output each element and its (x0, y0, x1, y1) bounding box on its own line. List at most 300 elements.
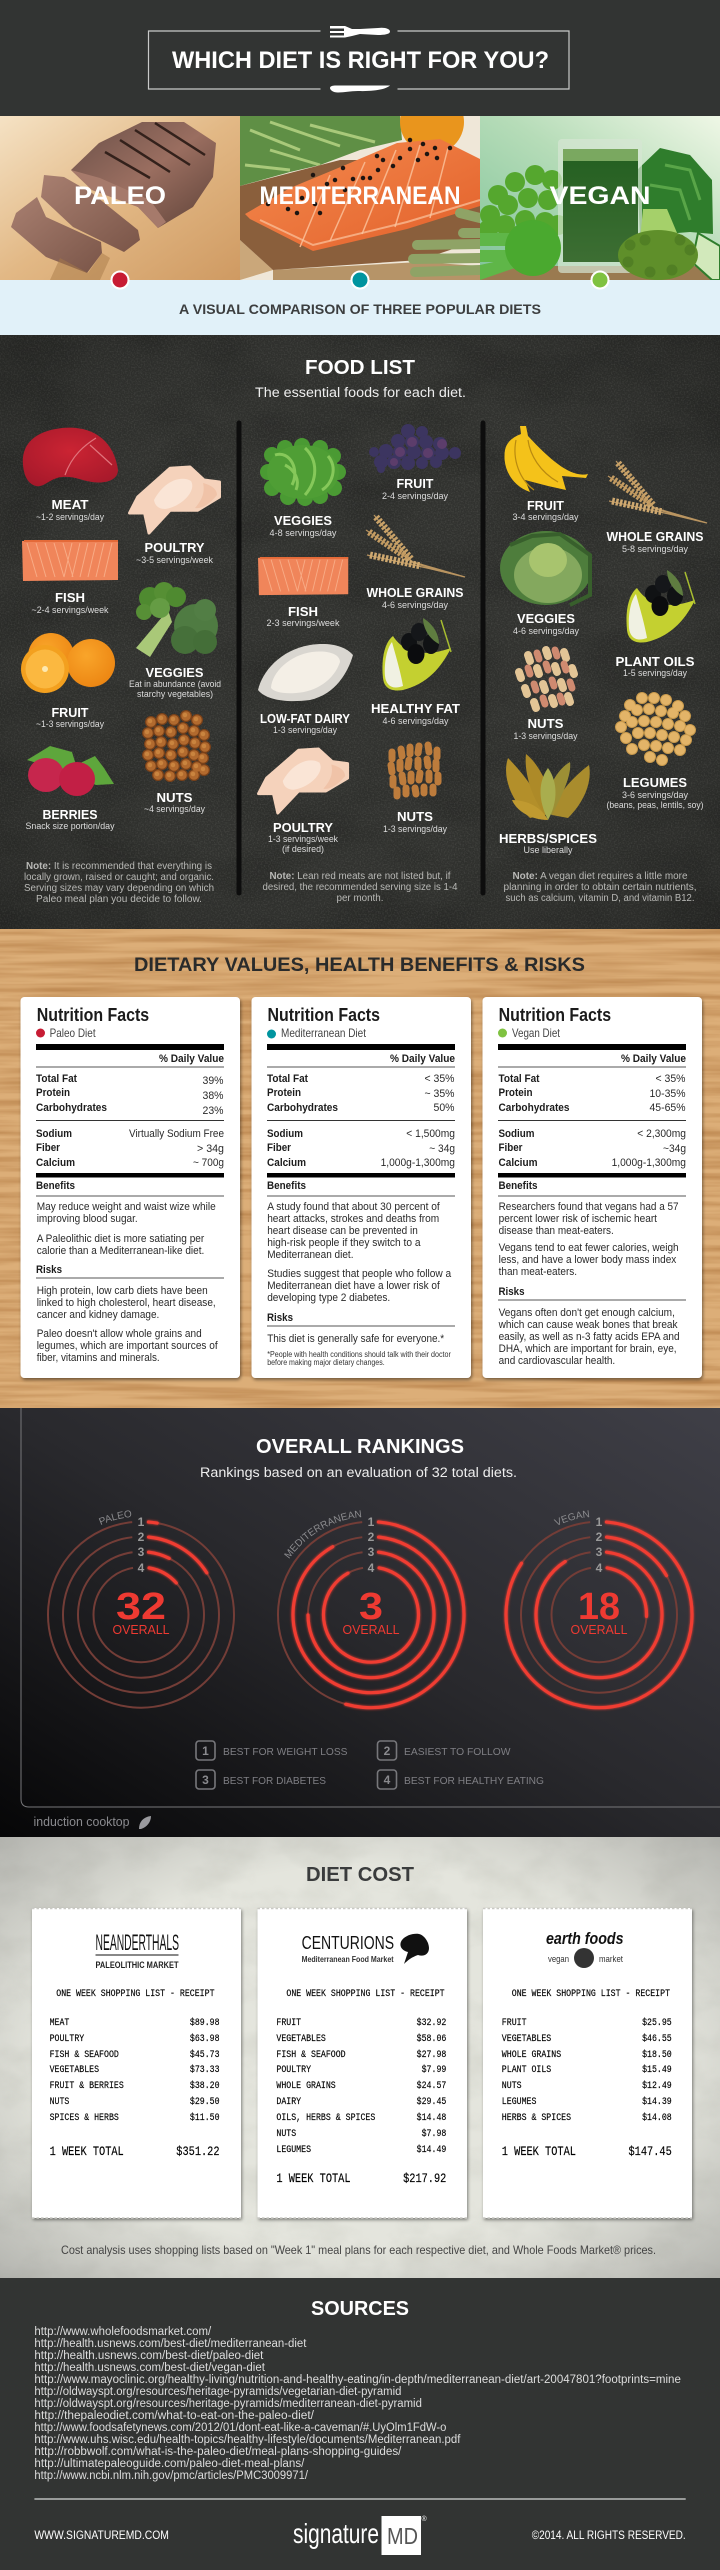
food: veggies: starchy vegetables) (137, 689, 213, 700)
heading: DIET COST (306, 1864, 414, 1886)
chart: mediterranean rings: 2 (368, 1530, 375, 1544)
receipt: mediterranean: $27.98 (417, 2048, 446, 2060)
card: paleo: 23% (202, 1105, 224, 1117)
food: berries (26, 746, 115, 832)
logo: signature md: MD (387, 2523, 418, 2549)
receipt: mediterranean: $58.06 (417, 2032, 446, 2044)
receipt: paleo: $11.50 (190, 2111, 220, 2123)
receipt: vegan: $14.08 (642, 2111, 672, 2123)
chart: vegan rings: VEGAN (554, 1510, 590, 1525)
food: low-fat dairy: 1-3 servings/day (273, 725, 337, 736)
receipt: vegan (483, 1908, 692, 2218)
panel: sources (0, 2278, 720, 2570)
receipt: mediterranean: ONE WEEK SHOPPING LIST - RECEIPT (286, 1987, 445, 1999)
food: fruit (21, 633, 115, 730)
icon: knife (330, 86, 390, 92)
card: paleo: Sodium (36, 1128, 72, 1140)
receipt: paleo: $351.22 (176, 2145, 220, 2159)
heading: DIETARY VALUES, HEALTH BENEFITS & RISKS (134, 955, 585, 976)
receipt: vegan: VEGETABLES (502, 2032, 552, 2044)
source list: http://www.uhs.wisc.edu/health-topics/healthy-lifestyle/documents/Mediterranean.pdf (34, 2434, 461, 2446)
food: herbs and spices (499, 754, 597, 856)
icon: globe (574, 1948, 594, 1968)
card: mediterranean: high-risk people if they switch to a (267, 1237, 421, 1249)
card: vegan: Risks (498, 1286, 524, 1298)
card: mediterranean: 1,000g-1,300mg (381, 1157, 455, 1169)
source list: http://oldwayspt.org/resources/heritage-pyramids/vegetarian-diet-pyramid (34, 2386, 401, 2398)
food: whole grains: 4-6 servings/day (382, 600, 448, 611)
card: vegan: and cardiovascular health. (499, 1355, 615, 1367)
dot: paleo (36, 1028, 45, 1038)
card: mediterranean: This diet is generally safe for everyone.* (267, 1333, 444, 1345)
food: herbs and spices: HERBS/SPICES (499, 832, 597, 846)
food: plant oils: PLANT OILS (616, 655, 694, 669)
receipt: paleo: SPICES & HERBS (50, 2111, 119, 2123)
card: mediterranean: ~ 34g (429, 1143, 455, 1155)
food: nuts: 1-3 servings/day (514, 731, 578, 742)
note: paleo (24, 861, 214, 905)
food: nuts: ~4 servings/day (144, 804, 205, 815)
chart: paleo rings: OVERALL (112, 1622, 170, 1637)
logo: earth foods (546, 1929, 624, 1968)
label: vegan: VEGAN (550, 182, 650, 210)
food: fruit (504, 426, 588, 523)
receipt: mediterranean: $14.49 (417, 2143, 446, 2155)
card: mediterranean: 50% (434, 1102, 455, 1114)
legend (196, 1741, 544, 1789)
logo: centurions (302, 1933, 429, 1964)
chart: paleo rings: 1 (138, 1515, 145, 1529)
logo: centurions: CENTURIONS (302, 1933, 394, 1953)
food: poultry (258, 749, 348, 855)
legend: EASIEST TO FOLLOW (404, 1746, 511, 1758)
card: vegan: disease than meat-eaters. (499, 1225, 614, 1237)
logo: earth foods: vegan (548, 1954, 569, 1965)
dot: vegan (498, 1028, 507, 1038)
card: mediterranean: Fiber (267, 1142, 292, 1154)
receipt: mediterranean: 1 WEEK TOTAL (276, 2172, 351, 2186)
food: nuts: 1-3 servings/day (383, 824, 447, 835)
receipt: vegan: WHOLE GRAINS (502, 2048, 562, 2060)
food: nuts: NUTS (156, 791, 192, 805)
food: fruit: ~1-3 servings/day (36, 719, 104, 730)
subtitle: A VISUAL COMPARISON OF THREE POPULAR DIETS (179, 302, 541, 317)
receipt: mediterranean: $7.98 (422, 2127, 446, 2139)
column: paleo foods (21, 428, 221, 905)
chart: vegan rings: 4 (596, 1561, 603, 1575)
source list: http://health.usnews.com/best-diet/paleo-diet (34, 2350, 264, 2362)
card: vegan: Vegans tend to eat fewer calories, weigh (499, 1242, 679, 1254)
dot: paleo (112, 272, 128, 288)
chart: mediterranean rings: 4 (368, 1561, 375, 1575)
card: vegan: ~34g (663, 1143, 686, 1155)
logo: signature md (293, 2515, 428, 2555)
food: nuts (144, 715, 205, 815)
card: vegan: Researchers found that vegans had a 57 (499, 1201, 679, 1213)
card: mediterranean: Benefits (267, 1180, 306, 1192)
card: vegan: 45-65% (650, 1102, 686, 1114)
receipt: vegan: $18.50 (642, 2048, 672, 2060)
card: vegan: < 35% (656, 1073, 686, 1085)
receipt: vegan: LEGUMES (502, 2095, 537, 2107)
card: paleo: cancer and kidney damage. (37, 1309, 159, 1321)
legend: 4 (384, 1773, 391, 1787)
receipt: paleo: 1 WEEK TOTAL (50, 2145, 124, 2159)
card: paleo: calorie than a Mediterranean-like diet. (37, 1245, 204, 1257)
receipt: paleo: $45.73 (190, 2048, 220, 2060)
note: paleo: Note: It is recommended that everything is (26, 861, 212, 872)
food: veggies: Eat in abundance (avoid (129, 679, 221, 690)
food: berries: BERRIES (42, 808, 98, 822)
card: vegan: less, and have a lower body mass index (499, 1254, 677, 1266)
receipt: paleo: $29.50 (190, 2095, 220, 2107)
receipt: mediterranean: LEGUMES (276, 2143, 311, 2155)
chart: mediterranean rings: MEDITERRANEAN (284, 1510, 362, 1558)
food: legumes: 3-6 servings/day (622, 790, 688, 801)
food: healthy fat: HEALTHY FAT (371, 702, 460, 716)
card: paleo: Nutrition Facts (37, 1005, 149, 1025)
card: mediterranean (252, 997, 471, 1378)
card: paleo: Carbohydrates (36, 1102, 107, 1114)
chart: vegan rings (502, 1510, 696, 1712)
food: veggies: 4-6 servings/day (513, 626, 579, 637)
receipt: paleo (32, 1908, 241, 2218)
food: fish (258, 557, 348, 629)
food: fish (22, 540, 118, 616)
receipt: vegan: 1 WEEK TOTAL (502, 2145, 576, 2159)
card: paleo: May reduce weight and waist wize while (37, 1201, 216, 1213)
receipt: mediterranean: FRUIT (276, 2016, 302, 2028)
copyright: ©2014. ALL RIGHTS RESERVED. (532, 2528, 686, 2542)
receipt: vegan: $12.49 (642, 2079, 672, 2091)
card: paleo (20, 997, 240, 1378)
logo: earth foods: market (599, 1954, 623, 1965)
title: WHICH DIET IS RIGHT FOR YOU? (172, 47, 549, 74)
card: paleo: 39% (202, 1075, 224, 1087)
card: mediterranean: Mediterranean diet have a lower risk of (267, 1280, 440, 1292)
legend: BEST FOR WEIGHT LOSS (223, 1746, 348, 1758)
food: veggies (267, 445, 339, 539)
card: mediterranean: ~ 35% (424, 1088, 455, 1100)
subheading: The essential foods for each diet. (255, 385, 466, 400)
food: fruit (369, 424, 461, 502)
card: mediterranean: Sodium (267, 1128, 303, 1140)
food: low-fat dairy: LOW-FAT DAIRY (260, 712, 351, 726)
card: vegan (482, 997, 702, 1378)
note: vegan (504, 871, 696, 904)
card: mediterranean: Studies suggest that people who follow a (267, 1268, 451, 1280)
heading: OVERALL RANKINGS (256, 1436, 464, 1458)
dot: mediterranean (267, 1030, 276, 1038)
receipt: mediterranean: $24.57 (417, 2079, 446, 2091)
source list: http://www.ncbi.nlm.nih.gov/pmc/articles/PMC3009971/ (34, 2470, 309, 2482)
food: whole grains (606, 461, 707, 555)
panel: diet cost (0, 1837, 720, 2278)
food: poultry: POULTRY (144, 541, 205, 555)
food: whole grains: WHOLE GRAINS (606, 530, 704, 544)
food: veggies: VEGGIES (146, 666, 204, 680)
card: mediterranean: *People with health conditions should talk with their doctor (267, 1350, 451, 1359)
panel: dietary values (0, 929, 720, 1408)
food: fruit: FRUIT (527, 499, 564, 513)
source list: http://health.usnews.com/best-diet/mediterranean-diet (34, 2338, 307, 2350)
receipt: mediterranean: $32.92 (417, 2016, 446, 2028)
legend: 3 (202, 1773, 209, 1787)
receipt: vegan: NUTS (502, 2079, 522, 2091)
card: paleo: % Daily Value (159, 1053, 224, 1065)
card: vegan: 10-35% (650, 1088, 686, 1100)
card: paleo: fiber, vitamins and minerals. (37, 1352, 160, 1364)
card: vegan: easily, as well as n-3 fatty acids EPA and (499, 1331, 680, 1343)
food: nuts (514, 650, 578, 742)
card: mediterranean: Mediterranean diet. (267, 1249, 354, 1261)
receipt: mediterranean: OILS, HERBS & SPICES (276, 2111, 376, 2123)
card: vegan: 1,000g-1,300mg (612, 1157, 686, 1169)
chart: mediterranean rings: OVERALL (342, 1622, 400, 1637)
card: mediterranean: % Daily Value (390, 1053, 455, 1065)
card: vegan: % Daily Value (621, 1053, 686, 1065)
chart: paleo rings: PALEO (98, 1510, 132, 1525)
card: paleo: Risks (36, 1264, 62, 1276)
note: vegan: such as calcium, vitamin D, and vitamin B12. (506, 893, 694, 904)
card: paleo: High protein, low carb diets have been (37, 1285, 208, 1297)
header band (0, 0, 720, 116)
card: paleo: linked to high cholesterol, heart disease, (37, 1297, 216, 1309)
food: low-fat dairy (258, 644, 353, 736)
source list: http://oldwayspt.org/resources/heritage-pyramids/mediterranean-diet-pyramid (34, 2398, 422, 2410)
receipt: paleo: NUTS (50, 2095, 70, 2107)
receipt: vegan: $14.39 (642, 2095, 672, 2107)
food: veggies (129, 582, 221, 700)
food: healthy fat: 4-6 servings/day (382, 716, 449, 727)
chart: paleo rings: 32 (116, 1586, 166, 1628)
heading: FOOD LIST (305, 357, 415, 379)
source list: http://thepaleodiet.com/what-to-eat-on-the-paleo-diet/ (34, 2410, 315, 2422)
receipt: paleo: VEGETABLES (50, 2063, 100, 2075)
legend: 1 (202, 1744, 209, 1758)
chart: vegan rings: 1 (596, 1515, 603, 1529)
note: mediterranean: Note: Lean red meats are not listed but, if (270, 871, 451, 882)
food: veggies: VEGGIES (274, 514, 332, 528)
chart: paleo rings: 4 (138, 1561, 145, 1575)
card: vegan: DHA, which are important for brain, eye, (499, 1343, 677, 1355)
food: poultry: 1-3 servings/week (268, 834, 338, 845)
source list: http://robbwolf.com/what-is-the-paleo-diet/meal-plans-shopping-guides/ (34, 2446, 402, 2458)
food: meat: ~1-2 servings/day (36, 512, 104, 523)
receipt: paleo: FRUIT & BERRIES (50, 2079, 124, 2091)
food: whole grains (366, 515, 465, 611)
card: mediterranean: < 1,500mg (406, 1128, 455, 1140)
food: poultry (130, 467, 220, 566)
receipt: mediterranean: $217.92 (403, 2172, 446, 2186)
card: mediterranean: Nutrition Facts (268, 1005, 380, 1025)
note: mediterranean: desired, the recommended serving size is 1-4 (262, 882, 458, 893)
receipt: mediterranean: WHOLE GRAINS (276, 2079, 336, 2091)
food: fish: ~2-4 servings/week (32, 605, 109, 616)
chart: vegan rings: 18 (578, 1586, 620, 1628)
card: paleo: Benefits (36, 1180, 75, 1192)
food: legumes: LEGUMES (623, 776, 687, 790)
food: nuts (383, 745, 447, 835)
photo: paleo (0, 116, 240, 280)
title frame (148, 31, 569, 89)
receipt: vegan: $15.49 (642, 2063, 672, 2075)
chart: vegan rings: OVERALL (570, 1622, 628, 1637)
footer url: WWW.SIGNATUREMD.COM (34, 2528, 169, 2542)
receipt: paleo: ONE WEEK SHOPPING LIST - RECEIPT (56, 1987, 215, 1999)
card: paleo: Paleo Diet (50, 1026, 96, 1040)
food: fish: FISH (288, 605, 318, 619)
dot: mediterranean (352, 272, 368, 288)
source list: http://www.foodsafetynews.com/2012/01/dont-eat-like-a-caveman/#.UyOlm1FdW-o (34, 2422, 446, 2434)
receipt: vegan: $25.95 (642, 2016, 672, 2028)
card: paleo: 38% (202, 1090, 224, 1102)
note: paleo: Paleo meal plan you decide to follow. (36, 894, 202, 905)
card: mediterranean: Calcium (267, 1157, 306, 1169)
food: herbs and spices: Use liberally (524, 845, 573, 856)
card: vegan: Vegan Diet (512, 1026, 561, 1040)
food: fish: 2-3 servings/week (266, 618, 340, 629)
note: paleo: Serving sizes may vary depending on which (24, 883, 214, 894)
receipt: vegan: ONE WEEK SHOPPING LIST - RECEIPT (512, 1987, 670, 1999)
food: veggies: VEGGIES (517, 612, 575, 626)
photo: mediterranean (240, 116, 480, 280)
card: mediterranean: before making major dietary changes. (267, 1358, 385, 1367)
logo: earth foods: earth foods (546, 1929, 624, 1948)
panel: overall rankings (0, 1408, 720, 1837)
icon: leaf (139, 1816, 151, 1829)
food: fruit: FRUIT (396, 477, 434, 491)
food: poultry: (if desired) (282, 844, 324, 855)
card: vegan: Total Fat (498, 1073, 540, 1085)
chart: paleo rings (47, 1510, 235, 1709)
heading: SOURCES (311, 2298, 409, 2320)
receipt: paleo: FISH & SEAFOOD (50, 2048, 119, 2060)
food: whole grains: 5-8 servings/day (622, 544, 688, 555)
label: paleo: PALEO (74, 182, 166, 210)
card: paleo: Fiber (36, 1142, 61, 1154)
card: vegan: Nutrition Facts (499, 1005, 611, 1025)
food: veggies: 4-8 servings/day (270, 528, 337, 539)
receipt: mediterranean: POULTRY (276, 2063, 311, 2075)
note: mediterranean: per month. (336, 893, 384, 904)
food: veggies (500, 531, 592, 637)
receipt: paleo: $38.20 (190, 2079, 220, 2091)
chart: mediterranean rings (277, 1510, 468, 1712)
food: poultry: ~3-5 servings/week (136, 555, 213, 566)
card: paleo: A Paleolithic diet is more satiating per (37, 1233, 205, 1245)
food: plant oils (616, 570, 695, 679)
food: fruit: FRUIT (52, 706, 89, 720)
card: vegan: Benefits (498, 1180, 538, 1192)
note: mediterranean (262, 871, 458, 904)
food: fruit: 2-4 servings/day (382, 491, 448, 502)
induction cooktop mark: induction cooktop (34, 1814, 130, 1829)
source list: http://www.mayoclinic.org/healthy-living/nutrition-and-healthy-eating/in-depth/mediterranean-diet/art-20047801?footprints=mine (34, 2374, 681, 2386)
card: paleo: Calcium (36, 1157, 75, 1169)
subtitle strip (0, 272, 720, 335)
food: fish: FISH (55, 591, 85, 605)
card: mediterranean: heart disease can be prevented in (267, 1225, 418, 1237)
receipt: paleo: MEAT (50, 2016, 70, 2028)
cost note: Cost analysis uses shopping lists based on "Week 1" meal plans for each respective diet, and Whole Foods Market® prices. (61, 2243, 656, 2257)
chart: mediterranean rings: 3 (368, 1545, 375, 1559)
food: plant oils: 1-5 servings/day (623, 668, 687, 679)
card: vegan: Sodium (498, 1128, 535, 1140)
card: vegan: Fiber (498, 1142, 523, 1154)
food: nuts: NUTS (528, 717, 564, 731)
legend: 2 (384, 1744, 391, 1758)
card: vegan: Vegans often don't get enough calcium, (499, 1307, 675, 1319)
source list: http://www.wholefoodsmarket.com/ (34, 2326, 212, 2338)
chart: vegan rings: 2 (596, 1530, 603, 1544)
receipt: mediterranean: NUTS (276, 2127, 297, 2139)
card: paleo: ~ 700g (193, 1157, 224, 1169)
note: vegan: planning in order to obtain certain nutrients, (504, 882, 696, 893)
label: mediterranean: MEDITERRANEAN (260, 182, 460, 210)
food: healthy fat (371, 618, 460, 727)
receipt: mediterranean: $7.99 (422, 2063, 446, 2075)
chart: paleo rings: 3 (138, 1545, 145, 1559)
legend: BEST FOR HEALTHY EATING (404, 1775, 544, 1787)
chart: vegan rings: 3 (596, 1545, 603, 1559)
card: vegan: Carbohydrates (498, 1102, 570, 1114)
food: legumes (606, 698, 704, 811)
card: mediterranean: Mediterranean Diet (281, 1026, 367, 1040)
food: meat: MEAT (52, 498, 89, 512)
card: vegan: than meat-eaters. (499, 1266, 577, 1278)
card: mediterranean: developing type 2 diabetes. (267, 1292, 390, 1304)
card: paleo: Virtually Sodium Free (129, 1128, 224, 1140)
card: paleo: > 34g (197, 1143, 224, 1155)
chart: paleo rings: 2 (138, 1530, 145, 1544)
receipt: vegan: HERBS & SPICES (502, 2111, 571, 2123)
card: paleo: legumes, which are important sources of (37, 1340, 218, 1352)
card: mediterranean: < 35% (424, 1073, 455, 1085)
receipt: paleo: POULTRY (50, 2032, 85, 2044)
receipt: mediterranean: DAIRY (276, 2095, 302, 2107)
dot: vegan (592, 272, 608, 288)
card: paleo: Protein (36, 1087, 70, 1099)
legend: BEST FOR DIABETES (223, 1775, 326, 1787)
food: nuts: NUTS (397, 810, 433, 824)
receipt: mediterranean (258, 1908, 467, 2218)
photo: vegan (480, 116, 720, 280)
food: berries: Snack size portion/day (26, 821, 115, 832)
logo: signature md: ® (422, 2515, 428, 2523)
chart: mediterranean rings: 1 (368, 1515, 375, 1529)
source list (34, 2326, 681, 2482)
source list: http://health.usnews.com/best-diet/vegan-diet (34, 2362, 266, 2374)
receipt: vegan: $147.45 (629, 2145, 672, 2159)
food: meat (23, 428, 118, 523)
logo: signature md: signature (293, 2518, 379, 2549)
receipt: mediterranean: VEGETABLES (276, 2032, 326, 2044)
card: paleo: Paleo doesn't allow whole grains and (37, 1328, 202, 1340)
card: vegan: < 2,300mg (637, 1128, 686, 1140)
card: mediterranean: Total Fat (267, 1073, 308, 1085)
logo: neanderthals (96, 1930, 179, 1970)
logo: centurions: Mediterranean Food Market (302, 1954, 394, 1964)
chart: mediterranean rings: 3 (359, 1586, 383, 1628)
card: vegan: Protein (498, 1087, 533, 1099)
food: legumes: (beans, peas, lentils, soy) (606, 800, 704, 811)
icon: headdress (400, 1934, 429, 1964)
card: mediterranean: A study found that about 30 percent of (267, 1201, 440, 1213)
receipt: mediterranean: FISH & SEAFOOD (276, 2048, 346, 2060)
receipt: paleo: $63.98 (190, 2032, 220, 2044)
receipt: mediterranean: $29.45 (417, 2095, 446, 2107)
